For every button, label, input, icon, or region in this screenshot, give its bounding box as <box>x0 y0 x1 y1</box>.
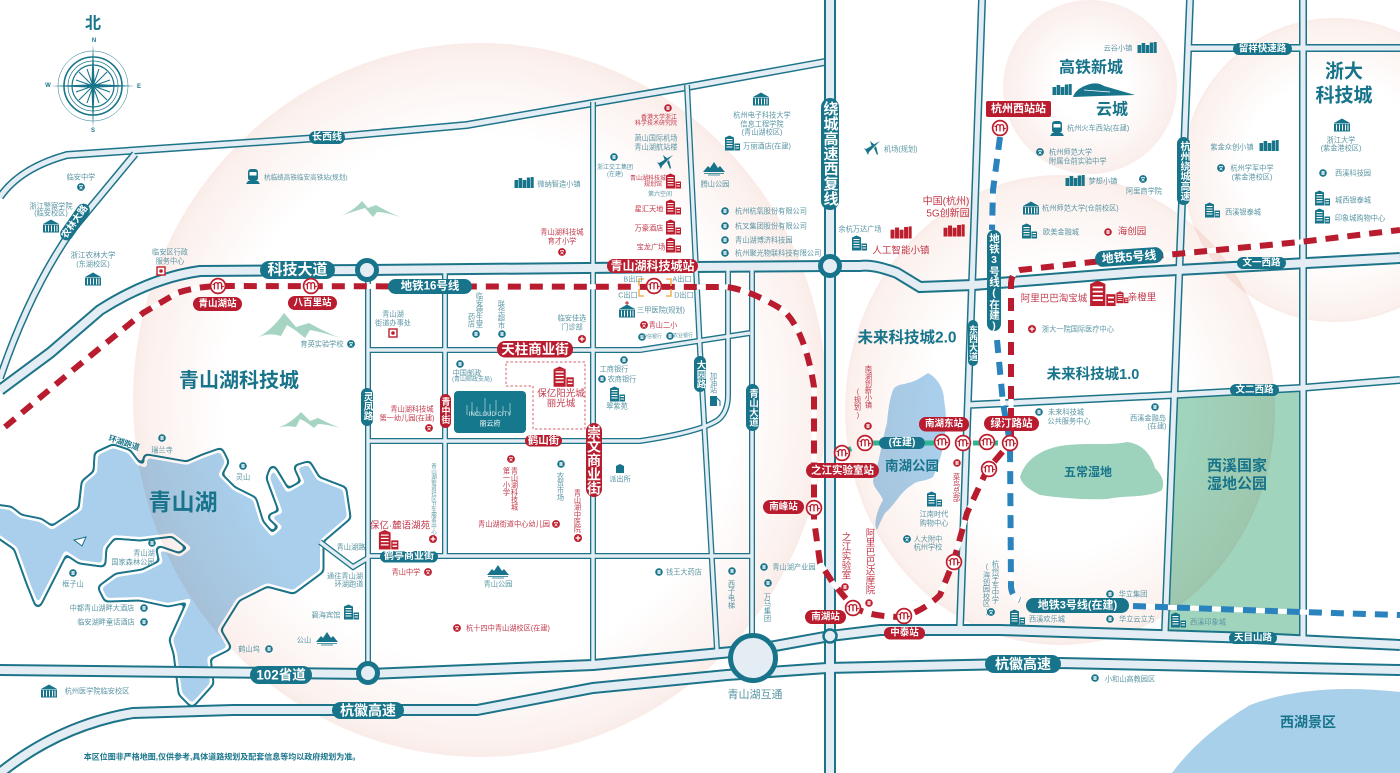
compass <box>45 38 141 134</box>
north label: 北 <box>85 14 101 32</box>
POI: north of 科技大道: 第六空间 <box>648 190 672 198</box>
POI: 未来科技城: 西溪印象城 <box>1190 618 1226 626</box>
road labels: 绕城高速西复线 <box>822 100 838 206</box>
POI: 未来科技城: 杭州学军中学 <box>992 559 1000 603</box>
POI: central grid: 青山中学 <box>392 568 420 576</box>
POI: north of 科技大道: 万豪酒店 <box>635 224 663 232</box>
lake: 青山湖 <box>0 448 347 703</box>
park: 西溪国家湿地公园 area <box>1167 390 1300 635</box>
POI: 未来科技城: 阿里巴巴淘宝城 <box>1021 292 1088 304</box>
POI: north of 科技大道: 微纳智造小镇 <box>537 180 581 188</box>
POI: north of 科技大道: 杭叉集团股份有限公司 <box>735 222 807 230</box>
POI: 高铁新城 and 浙大科技城: 附属仓前实验中学 <box>1049 156 1107 166</box>
POI: central grid: 青山湖互通 <box>728 688 782 701</box>
POI: around the lake: 临安湖畔童话酒店 <box>77 618 135 626</box>
POI: central grid: 临安德生堂 <box>476 291 484 328</box>
red commercial street and station labels: 八百里站 <box>293 296 332 308</box>
road labels: 东西大道 <box>968 324 978 362</box>
POI: around the lake: 碧海宾馆 <box>312 610 340 620</box>
POI: west side: (东湖校区) <box>76 260 110 268</box>
metro exits: D出口 <box>674 290 694 300</box>
POI: central grid: 中国邮政 <box>453 368 481 378</box>
road labels: 地铁16号线 <box>401 278 460 292</box>
POI: around the lake: 国家森林公园 <box>111 558 155 566</box>
metro line 5 <box>1011 230 1400 443</box>
red commercial street and station labels: 南峰站 <box>769 500 798 512</box>
green metro segment <box>843 443 1010 452</box>
POI: central grid: 药店 <box>468 312 476 329</box>
POI: 未来科技城: 亲橙里 <box>1128 292 1156 304</box>
pink zone: 未来科技城 <box>845 175 1275 645</box>
compass: E <box>137 84 141 90</box>
red commercial street and station labels: 青山湖站 <box>198 298 237 310</box>
pink zone: 青山湖科技城 <box>133 43 827 757</box>
POI: 高铁新城 and 浙大科技城: 云谷小镇 <box>1104 44 1132 52</box>
POI: central grid: (青山邮政支局) <box>452 375 492 383</box>
POI: 未来科技城: 菜鸟总部 <box>952 472 962 503</box>
POI: around the lake: 中都青山湖畔大酒店 <box>70 604 134 612</box>
POI: north of 科技大道: 青山湖科技城 <box>540 228 584 236</box>
red commercial street and station labels: 崇文商业街 <box>586 425 602 495</box>
POI: 高铁新城 and 浙大科技城: 阿里商学院 <box>1126 186 1162 196</box>
POI: central grid: 青山湖科技城 <box>390 404 434 414</box>
road labels: 文二西路 <box>1235 384 1274 396</box>
POI: north of 科技大道: 规划馆 <box>644 180 662 188</box>
POI: central grid: 西子电梯 <box>728 580 736 610</box>
district titles: 青山湖科技城 <box>179 369 299 392</box>
POI: 未来科技城: (规划) <box>854 387 862 419</box>
POI: central grid: 青山湖科技城 <box>510 466 520 511</box>
POI: around the lake: 杭州医学院临安校区 <box>65 686 129 696</box>
road labels: 杭徽高速 <box>995 656 1051 672</box>
pink zone: 浙大科技城 <box>1183 18 1400 322</box>
POI: north of 科技大道 <box>514 92 821 258</box>
POI: 未来科技城: 江南时代 <box>920 510 948 518</box>
red commercial street and station labels: 杭州西站站 <box>991 101 1046 115</box>
POI: 高铁新城 and 浙大科技城: 欧美金融城 <box>1043 228 1079 236</box>
POI: around the lake: 环湖跑道 <box>107 433 141 452</box>
POI: north of 科技大道: 万丽酒店(在建) <box>743 142 791 150</box>
POI: around the lake: 环湖跑道 <box>335 580 363 588</box>
red commercial street and station labels: 鹤山街 <box>528 434 560 447</box>
road labels: 地铁3号线(在建) <box>988 232 1000 332</box>
POI: 未来科技城: 阿里巴巴达摩院 <box>864 528 875 595</box>
POI: 高铁新城 and 浙大科技城: 紫金众创小镇 <box>1210 142 1254 152</box>
POI: 高铁新城 and 浙大科技城: 杭州火车西站(在建) <box>1067 124 1129 132</box>
POI: north of 科技大道: 浙江交工集团 <box>597 163 633 171</box>
POI: west side: 育英实验学校 <box>300 340 344 348</box>
POI: 未来科技城: 小和山高教园区 <box>1105 674 1155 684</box>
POI: north of 科技大道: 腾山公园 <box>701 180 729 188</box>
POI: around the lake <box>41 433 365 698</box>
POI: west side <box>29 169 411 348</box>
POI: 未来科技城: (在建) <box>1147 422 1167 430</box>
road labels: 杭州绕城高速 <box>1178 140 1190 202</box>
district titles: 未来科技城2.0 <box>857 328 957 346</box>
planned plot: 保亿阳光城: 丽光城 <box>547 398 576 410</box>
POI: north of 科技大道: 信息工程学院 <box>740 120 784 128</box>
POI: central grid: 青山湖街道社区卫生服务中心 <box>430 462 437 535</box>
district titles: 科技城 <box>1315 84 1373 106</box>
metro station icons <box>211 121 1017 623</box>
POI: central grid: 翠紫苑 <box>606 402 628 410</box>
POI: around the lake: 通往青山湖 <box>327 572 363 580</box>
compass: S <box>91 128 95 134</box>
red commercial street and station labels <box>193 101 1051 640</box>
POI: central grid: 派出所 <box>609 474 631 484</box>
POI: 未来科技城: 中国(杭州) <box>923 194 969 208</box>
POI: central grid: 临安佳选 <box>558 314 586 322</box>
POI: 高铁新城 and 浙大科技城 <box>1022 42 1385 238</box>
POI: west side: 临安中学 <box>67 172 95 182</box>
POI: around the lake: 公山 <box>297 636 311 644</box>
POI: 未来科技城: 杭州学校 <box>914 542 942 552</box>
POI: north of 科技大道: 杭州聚光物联科技有限公司 <box>735 248 821 258</box>
planned plot: 保亿阳光城: 保亿阳光城 <box>537 388 585 400</box>
POI: 高铁新城 and 浙大科技城: 印象城购物中心 <box>1335 214 1385 222</box>
district titles: 五常湿地 <box>1064 464 1112 479</box>
POI: around the lake: 青山湖路 <box>337 542 365 552</box>
metro line 16 <box>0 286 1010 617</box>
road labels: 鹤亭商业街 <box>384 549 434 562</box>
road labels: 文一西路 <box>1242 256 1281 268</box>
POI: 高铁新城 and 浙大科技城: 杭州师范大学(仓前校区) <box>1042 204 1119 212</box>
POI: north of 科技大道: (青山湖校区) <box>742 128 782 136</box>
POI: north of 科技大道: 科学技术研究院 <box>635 119 677 127</box>
POI: central grid: 青山湖街道中心幼儿园 <box>478 520 550 528</box>
road labels: 地铁5号线 <box>1101 247 1157 266</box>
road labels: 科技大道 <box>267 260 328 278</box>
road labels: (在建) <box>889 436 915 448</box>
POI: 未来科技城: 华立云立方 <box>1119 614 1155 624</box>
pink zone: 高铁新城 <box>1003 0 1177 174</box>
POI: central grid: 加油站 <box>710 371 718 395</box>
POI: 未来科技城: 之江实验室 <box>840 531 851 580</box>
POI: central grid: 保亿·麓语湖苑 <box>370 520 431 532</box>
POI: north of 科技大道: 星汇天地 <box>635 204 663 214</box>
road labels: 地铁3号线(在建) <box>1038 598 1118 612</box>
POI: central grid: 农贸市场 <box>556 471 566 502</box>
district titles: 高铁新城 <box>1059 58 1123 76</box>
POI: central grid: 联华超市 <box>498 299 506 330</box>
POI: north of 科技大道: 香港大学浙江 <box>641 113 677 121</box>
POI: 未来科技城: 5G创新园 <box>926 206 970 220</box>
road labels: 青山大道 <box>747 388 759 427</box>
POI: central grid: 第一小学 <box>502 466 512 496</box>
decorative mountains <box>257 201 400 428</box>
planned plot: 保亿阳光城 <box>506 362 585 429</box>
project: 丽云府: 丽云府 <box>480 418 500 428</box>
lake: 西湖 <box>1172 689 1400 773</box>
wetland: 五常湿地 area <box>1020 442 1163 499</box>
POI: 未来科技城: 人大附中 <box>914 534 942 544</box>
metro exits: A出口 <box>672 274 692 284</box>
red commercial street and station labels: 青中街 <box>440 396 450 425</box>
POI: 未来科技城: 南湖创新小镇 <box>864 364 874 409</box>
POI: west side: 服务中心 <box>156 256 184 266</box>
POI: central grid: 门诊部 <box>561 322 583 332</box>
POI: west side: (临安校区) <box>34 208 68 218</box>
red commercial street and station labels: 之江实验室站 <box>811 464 874 476</box>
red commercial street and station labels: 南湖站 <box>811 610 840 622</box>
district titles: 湿地公园 <box>1207 476 1267 492</box>
POI: north of 科技大道: 青山湖博济科技园 <box>735 236 793 244</box>
POI: 未来科技城: 公共服务中心 <box>1047 416 1091 426</box>
district titles: 西湖景区 <box>1280 714 1336 730</box>
compass: N <box>92 38 96 44</box>
POI: west side: 临安区行政 <box>152 248 188 256</box>
POI: 高铁新城 and 浙大科技城: 西溪银泰城 <box>1225 208 1261 216</box>
metro line 3 <box>992 137 1400 615</box>
POI: 高铁新城 and 浙大科技城: 杭州学军中学 <box>1230 164 1274 172</box>
lake: 南湖 <box>873 373 946 530</box>
POI: west side: 杭临绩高铁临安高铁站(规划) <box>264 172 348 182</box>
road labels: 天目山路 <box>1234 632 1272 644</box>
district titles: 云城 <box>1096 100 1128 118</box>
POI: around the lake: 青山湖 <box>133 548 155 558</box>
POI: 未来科技城: 华立集团 <box>1119 590 1147 598</box>
POI: west side: 街道办事处 <box>375 318 411 328</box>
POI: 高铁新城 and 浙大科技城: 西溪科技园 <box>1335 168 1371 178</box>
POI: north of 科技大道: 育才小学 <box>548 236 576 246</box>
metro exits: C出口 <box>618 290 638 300</box>
district titles: 未来科技城1.0 <box>1047 365 1139 383</box>
district titles: 青山湖 <box>148 489 218 515</box>
project: 丽云府 <box>454 391 526 433</box>
POI: north of 科技大道: 青山湖科技城 <box>630 174 666 182</box>
POI: around the lake: 框子山 <box>62 580 84 588</box>
POI: central grid: 青山二小 <box>649 320 677 330</box>
red commercial street and station labels: 青山湖科技城站 <box>610 258 695 273</box>
POI: 未来科技城: 西溪欢乐城 <box>1029 614 1065 624</box>
POI: 未来科技城: 西溪金融岛 <box>1130 414 1166 422</box>
POI: 高铁新城 and 浙大科技城: (紫金港校区) <box>1321 144 1361 152</box>
road labels: 农林大路 <box>59 202 91 241</box>
POI: 高铁新城 and 浙大科技城: 杭州师范大学 <box>1049 148 1092 156</box>
road labels: 长西线 <box>312 130 342 143</box>
interchange circles <box>358 256 840 682</box>
POI: central grid: 万马集团 <box>764 593 772 623</box>
POI: central grid: 中信银行 <box>642 333 662 340</box>
POI: central grid: 农商银行 <box>608 374 636 384</box>
road labels: 杭徽高速 <box>340 702 396 718</box>
metro exits <box>618 274 694 300</box>
road labels: 大园路 <box>694 359 706 389</box>
POI: around the lake: 灵山 <box>236 472 250 482</box>
POI: central grid: 青山湖中医院 <box>574 488 582 533</box>
POI: central grid <box>370 291 816 701</box>
POI: central grid: 杭十四中青山湖校区(在建) <box>466 624 550 632</box>
POI: 未来科技城: 浙大一院国际医疗中心 <box>1042 324 1114 334</box>
district titles: 南湖公园 <box>885 458 939 474</box>
POI: central grid: 农业银行 <box>673 332 693 339</box>
POI: north of 科技大道: 萧山国际机场 <box>634 134 678 142</box>
footer note: 本区位图非严格地图,仅供参考,具体道路规划及配套信息等均以政府规划为准。 <box>84 752 360 762</box>
POI: around the lake: 鹤山坞 <box>238 644 260 654</box>
POI: 高铁新城 and 浙大科技城: 浙江大学 <box>1327 136 1355 144</box>
POI: 未来科技城: 购物中心 <box>920 518 948 528</box>
POI: north of 科技大道: 杭州电子科技大学 <box>733 110 791 120</box>
POI: central grid: 钱王大药店 <box>666 568 702 576</box>
POI: west side: 浙江警察学院 <box>29 202 73 210</box>
district titles: 西溪国家 <box>1207 456 1267 474</box>
road labels: 灵凤路 <box>362 392 373 421</box>
POI: west side: 浙江农林大学 <box>70 250 116 260</box>
POI: north of 科技大道: 青山湖航站楼 <box>634 142 678 152</box>
POI: 高铁新城 and 浙大科技城: 海创园 <box>1118 226 1146 238</box>
project: 丽云府: INCLOUD CITY <box>469 412 511 418</box>
red commercial street and station labels: 南湖东站 <box>925 418 963 430</box>
POI: 未来科技城: 未来科技城 <box>1048 408 1084 416</box>
district titles: 浙大 <box>1325 60 1363 82</box>
road labels <box>58 42 1292 719</box>
red commercial street and station labels: 中泰站 <box>890 627 919 639</box>
red commercial street and station labels: 绿汀路站 <box>990 416 1033 430</box>
POI: 高铁新城 and 浙大科技城: 城西银泰城 <box>1335 196 1371 204</box>
compass: W <box>45 83 51 89</box>
POI: around the lake: 瑞兰寺 <box>151 446 173 454</box>
red commercial street and station labels: 天柱商业街 <box>501 341 569 357</box>
POI: central grid: 工商银行 <box>600 364 628 374</box>
POI: central grid: 第一幼儿园(在建) <box>379 414 435 422</box>
POI: 未来科技城: 余杭万达广场 <box>838 224 882 234</box>
road labels: 102省道 <box>256 666 306 682</box>
POI: central grid: 青山公园 <box>484 580 512 588</box>
road labels: 留祥快速路 <box>1239 42 1287 54</box>
POI: north of 科技大道: (在建) <box>607 170 623 178</box>
POI: 未来科技城: (海创园校区) <box>982 562 992 616</box>
POI: 高铁新城 and 浙大科技城: 梦想小镇 <box>1089 176 1117 186</box>
metro exits: B出口 <box>623 274 643 284</box>
POI: 高铁新城 and 浙大科技城: (紫金港校区) <box>1232 172 1272 182</box>
POI: central grid: 三甲医院(规划) <box>637 306 685 314</box>
POI: north of 科技大道: 杭州杭氧股份有限公司 <box>735 206 807 216</box>
POI: 未来科技城: 机场(规划) <box>884 144 918 154</box>
POI: 未来科技城 <box>838 141 1226 684</box>
POI: 未来科技城: 人工智能小镇 <box>872 244 930 256</box>
POI: north of 科技大道: 宝龙广场 <box>637 242 665 252</box>
POI: west side: 青山湖 <box>382 310 404 318</box>
district titles <box>148 58 1373 730</box>
POI: central grid: 青山湖产业园 <box>772 562 816 572</box>
